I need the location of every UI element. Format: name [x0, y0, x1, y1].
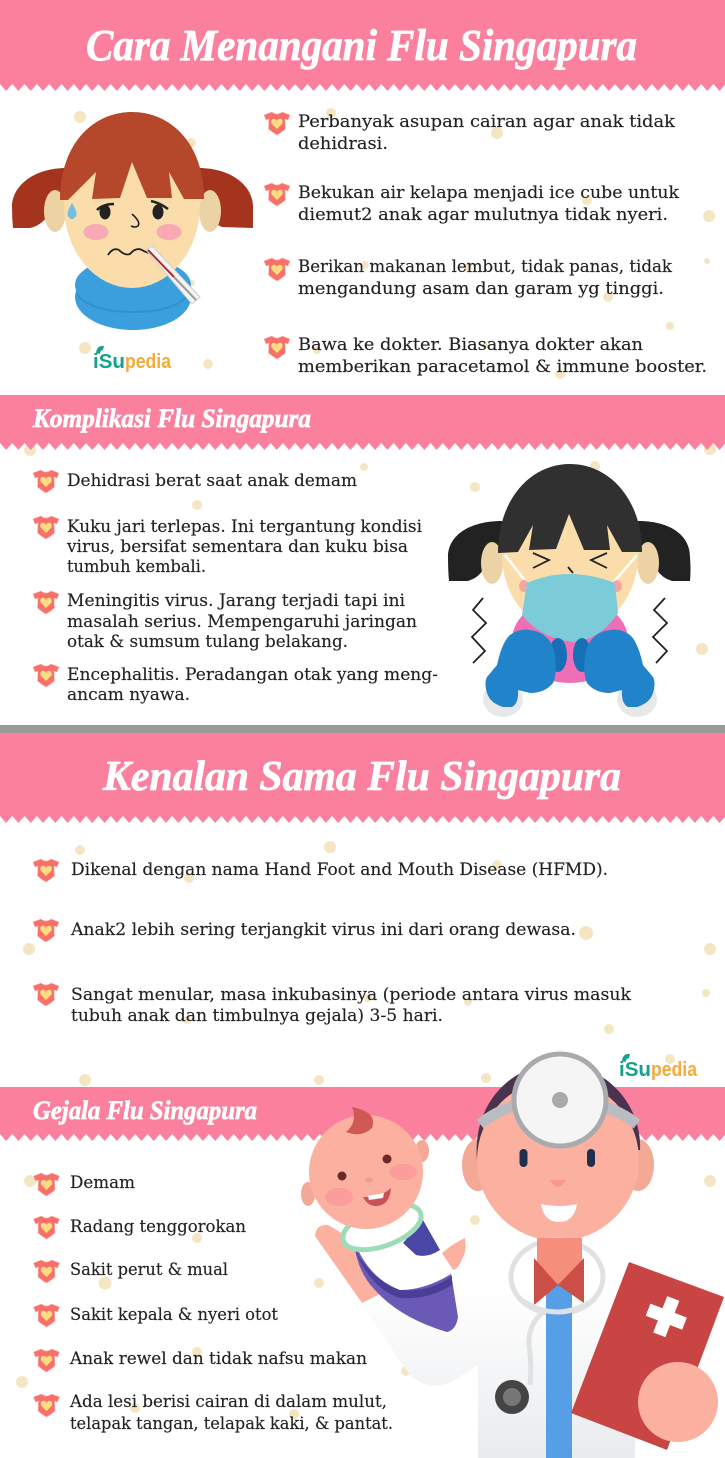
header band: Gejala [0, 1087, 725, 1141]
item: kuku [33, 516, 422, 576]
item: cairan [264, 112, 676, 153]
illustration: baby [301, 1107, 466, 1332]
list: cara menangani [264, 112, 707, 376]
head mirror [514, 1054, 606, 1146]
header band: Kenalan Sama [0, 733, 725, 823]
item: menular: tubuh anak dan timbulnya gejala) 3-5 hari. [71, 1006, 443, 1025]
item: makanan: Berikan makanan lembut, tidak panas, tidak [298, 257, 673, 276]
item: meningitis: masalah serius. Mempengaruhi jaringan [67, 612, 417, 631]
logo: iSupedia: iSu [619, 1059, 651, 1081]
item: perut [34, 1260, 228, 1283]
item: cairan: dehidrasi. [298, 134, 388, 153]
item: meningitis: Meningitis virus. Jarang terjadi tapi ini [67, 591, 405, 610]
item: dokter: memberikan paracetamol & immune booster. [298, 357, 707, 376]
item: kepala: Sakit kepala & nyeri otot [70, 1305, 278, 1324]
logo: iSupedia: pedia [651, 1059, 698, 1081]
header band: Cara Menangani [0, 0, 725, 91]
item: rewel: Anak rewel dan tidak nafsu makan [69, 1349, 367, 1368]
logo: iSupedia: iSu [93, 351, 125, 373]
illustration: doctor [360, 1054, 724, 1458]
item: encephalitis: Encephalitis. Peradangan otak yang meng- [67, 665, 438, 684]
header band: Komplikasi [0, 395, 725, 450]
item: HFMD: Dikenal dengan nama Hand Foot and Mouth Disease (HFMD). [71, 860, 608, 879]
title: Kenalan Sama Flu Singapura [102, 754, 621, 800]
logo: iSupedia [93, 346, 172, 373]
item: radang [34, 1216, 246, 1239]
logo: iSupedia: pedia [125, 351, 172, 373]
list: gejala [34, 1173, 393, 1433]
list: komplikasi [33, 470, 438, 704]
item: menular [33, 983, 632, 1025]
item: cairan: Perbanyak asupan cairan agar anak tidak [298, 112, 676, 131]
item: dokter: Bawa ke dokter. Biasanya dokter akan [298, 335, 643, 354]
title: Cara Menangani Flu Singapura [86, 21, 637, 70]
coat [360, 1240, 635, 1458]
heading: Gejala Flu Singapura [33, 1096, 257, 1125]
item: menular: Sangat menular, masa inkubasinya (periode antara virus masuk [71, 985, 632, 1004]
illustration: sick girl with thermometer [12, 112, 253, 330]
bow tie [534, 1258, 584, 1305]
item: makanan: mengandung asam dan garam yg tinggi. [298, 279, 664, 298]
item: encephalitis: ancam nyawa. [67, 685, 190, 704]
item: anak2: Anak2 lebih sering terjangkit virus ini dari orang dewasa. [70, 920, 576, 939]
item: meningitis [33, 591, 417, 651]
item: kuku: tumbuh kembali. [67, 557, 206, 576]
item: ice cube: diemut2 anak agar mulutnya tidak nyeri. [298, 205, 668, 224]
stethoscope [520, 1299, 595, 1385]
item: encephalitis [33, 664, 438, 704]
list: kenalan [33, 859, 632, 1025]
item: demam: Demam [70, 1173, 135, 1192]
item: kuku: Kuku jari terlepas. Ini tergantung kondisi [67, 517, 422, 536]
item: demam [34, 1173, 135, 1196]
item: ice cube [264, 183, 680, 224]
item: dokter [264, 335, 707, 376]
item: makanan [264, 257, 673, 298]
clipboard [571, 1262, 724, 1450]
item: lesi: telapak tangan, telapak kaki, & pantat. [70, 1414, 393, 1433]
item: radang: Radang tenggorokan [70, 1217, 246, 1236]
item: kepala [34, 1304, 278, 1327]
item: lesi [34, 1392, 393, 1433]
item: dehidrasi: Dehidrasi berat saat anak demam [67, 471, 357, 490]
heading: Komplikasi Flu Singapura [32, 404, 311, 433]
item: perut: Sakit perut & mual [70, 1260, 228, 1279]
item: lesi: Ada lesi berisi cairan di dalam mulut, [69, 1392, 387, 1411]
item: ice cube: Bekukan air kelapa menjadi ice cube untuk [298, 183, 680, 202]
illustration: girl with mask coughing [448, 464, 690, 717]
item: meningitis: otak & sumsum tulang belakang. [67, 632, 348, 651]
logo: iSupedia [619, 1054, 698, 1081]
item: kuku: virus, bersifat sementara dan kuku bisa [66, 537, 408, 556]
